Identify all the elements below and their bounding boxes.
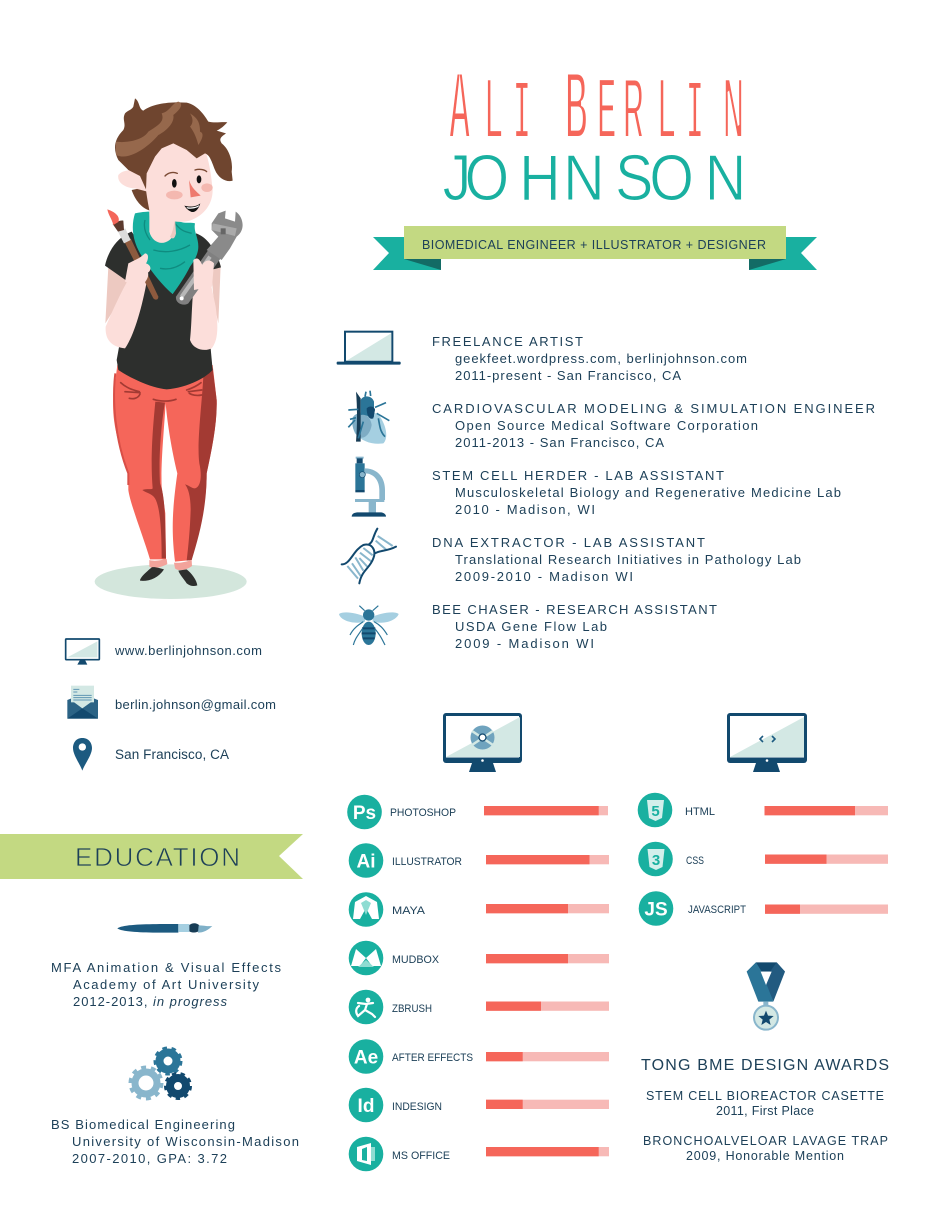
facial features: [165, 169, 213, 212]
skill: HTML: [638, 793, 888, 827]
skill: InDesign: [349, 1088, 609, 1122]
skill: Maya: [349, 892, 609, 927]
contact: email: berlin.johnson@gmail.com: [115, 697, 276, 712]
paint brush: [107, 209, 158, 300]
ribbon banner: BIOMEDICAL ENGINEER + ILLUSTRATOR + DESIGNER: [422, 238, 766, 252]
education icon: gears: [130, 1048, 190, 1098]
skill: HTML: HTML: [685, 806, 715, 818]
experience 5: BEE CHASER - RESEARCH ASSISTANT: [432, 602, 717, 617]
experience 5: [432, 602, 717, 651]
education entry: BS: BS Biomedical Engineering: [51, 1117, 235, 1132]
skill: JavaScript: [639, 891, 888, 926]
skill: Photoshop: Ps: [353, 803, 376, 824]
title: first names: R: [623, 59, 644, 157]
education entry: MFA: MFA Animation & Visual Effects: [51, 960, 282, 975]
experience icon: heart: [348, 391, 389, 444]
code monitor icon: [728, 714, 806, 772]
skill: InDesign: INDESIGN: [392, 1101, 442, 1113]
skill: ZBrush: ZBRUSH: [392, 1003, 432, 1015]
wrench: [176, 211, 243, 305]
skill: After Effects: AFTER EFFECTS: [392, 1052, 473, 1064]
scarf: [133, 212, 198, 294]
experience 4: [432, 535, 801, 584]
award 2: [643, 1134, 888, 1163]
skill: JavaScript: JAVASCRIPT: [688, 904, 746, 916]
ear: [118, 170, 147, 192]
award medal icon: [747, 962, 785, 1030]
skill: InDesign: Id: [358, 1096, 374, 1117]
contact icon: envelope: [67, 686, 98, 719]
hair: [115, 98, 233, 189]
award 2: 2009, Honorable Mention: [686, 1149, 844, 1163]
skill: Photoshop: PHOTOSHOP: [390, 807, 456, 819]
education entry: BS: [51, 1117, 299, 1166]
title: first names: [448, 53, 744, 165]
skill: CSS: [638, 842, 888, 876]
contact: location: San Francisco, CA: [115, 747, 229, 762]
experience 3: Musculoskeletal Biology and Regenerative Medicine Lab: [455, 485, 841, 500]
back of hair: [132, 187, 150, 211]
experience 2: Open Source Medical Software Corporation: [455, 418, 758, 433]
skill: Photoshop: [347, 795, 608, 829]
skill: Mudbox: [349, 941, 609, 975]
experience 1: geekfeet.wordpress.com, berlinjohnson.com: [455, 351, 747, 366]
skill: MS Office: [349, 1137, 609, 1171]
education icon: paintbrush: [117, 923, 212, 933]
hair highlights: [116, 102, 203, 157]
education entry: MFA: Academy of Art University: [73, 977, 260, 992]
skill: Illustrator: [349, 843, 609, 878]
skill: CSS: 3: [652, 852, 660, 869]
contact icon: location pin: [73, 738, 92, 771]
experience icon: DNA: [342, 529, 396, 583]
title: surname: JOHNSON: [443, 142, 746, 214]
education banner: EDUCATION: [75, 842, 240, 872]
hands: [125, 253, 214, 290]
contact icon: monitor: [66, 639, 99, 665]
contact: website: www.berlinjohnson.com: [114, 643, 262, 658]
character illustration: [95, 98, 247, 599]
title: first names: I: [686, 65, 703, 165]
experience 1: [432, 334, 747, 383]
experience 1: FREELANCE ARTIST: [432, 334, 583, 349]
title: first names: A: [448, 53, 471, 160]
experience icon: laptop: [337, 332, 401, 365]
skill: HTML: 5: [651, 803, 660, 820]
ribbon banner: [373, 226, 817, 270]
experience 2: [432, 401, 875, 450]
award 2: BRONCHOALVELOAR LAVAGE TRAP: [643, 1134, 888, 1148]
experience 4: Translational Research Initiatives in Pathology Lab: [455, 552, 801, 567]
skill: JavaScript: JS: [644, 900, 668, 920]
award 1: 2011, First Place: [716, 1104, 814, 1118]
skill: CSS: CSS: [686, 855, 704, 867]
skill: After Effects: [349, 1039, 609, 1074]
skill: Illustrator: Ai: [356, 852, 376, 872]
experience 2: 2011-2013 - San Francisco, CA: [455, 435, 664, 450]
skill: Mudbox: MUDBOX: [392, 954, 440, 966]
experience 3: [432, 468, 841, 517]
title: first names: N: [723, 59, 744, 157]
skill: MS Office: MS OFFICE: [392, 1150, 450, 1162]
award 1: [646, 1089, 884, 1118]
skill: After Effects: Ae: [354, 1048, 378, 1068]
software monitor icon: [444, 714, 521, 772]
education entry: MFA: 2012-2013, in progress: [73, 994, 228, 1009]
experience 5: 2009 - Madison WI: [455, 636, 594, 651]
title: first names: I: [513, 65, 531, 165]
face: [145, 140, 213, 222]
experience 3: 2010 - Madison, WI: [455, 502, 595, 517]
title: first names: B: [565, 53, 588, 160]
experience 4: DNA EXTRACTOR - LAB ASSISTANT: [432, 535, 705, 550]
ground shadow: [95, 564, 247, 599]
experience icon: microscope: [352, 457, 386, 517]
t-shirt: [105, 232, 221, 389]
education entry: MFA: [51, 960, 282, 1009]
award 1: STEM CELL BIOREACTOR CASETTE: [646, 1089, 884, 1103]
skill: ZBrush: [349, 990, 609, 1024]
experience 5: USDA Gene Flow Lab: [455, 619, 607, 634]
awards heading: TONG BME DESIGN AWARDS: [641, 1057, 889, 1074]
education banner: [0, 834, 303, 879]
skill: Illustrator: ILLUSTRATOR: [392, 856, 462, 868]
title: first names: L: [485, 59, 503, 157]
neck: [149, 203, 175, 243]
skill: Maya: MAYA: [392, 905, 426, 917]
forearms: [106, 265, 217, 350]
education entry: BS: 2007-2010, GPA: 3.72: [72, 1151, 227, 1166]
experience 3: STEM CELL HERDER - LAB ASSISTANT: [432, 468, 724, 483]
experience 4: 2009-2010 - Madison WI: [455, 569, 633, 584]
title: first names: L: [658, 59, 676, 157]
education entry: BS: University of Wisconsin-Madison: [72, 1134, 299, 1149]
experience icon: bee: [339, 606, 399, 645]
shoes: [140, 567, 197, 586]
pants: [113, 365, 217, 562]
experience 2: CARDIOVASCULAR MODELING & SIMULATION ENGINEER: [432, 401, 875, 416]
upper arms: [105, 265, 221, 323]
title: first names: E: [597, 59, 616, 157]
trouser cuffs: [149, 559, 192, 570]
experience 1: 2011-present - San Francisco, CA: [455, 368, 681, 383]
